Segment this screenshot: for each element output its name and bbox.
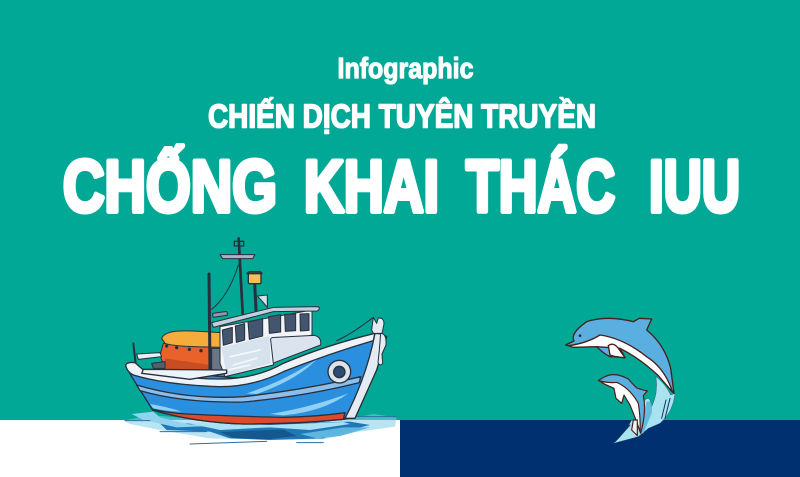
title kicker: Infographic: Infographic [338, 53, 474, 85]
bow rope [337, 317, 373, 341]
illustration: two jumping dolphins [566, 318, 675, 443]
main title: CHỐNG [63, 146, 277, 228]
illustration: fishing boat [123, 238, 397, 444]
mast with crossbar [212, 238, 255, 313]
water splash under boat [123, 412, 397, 444]
heading: campaign line: CHIẾN DỊCH TUYÊN TRUYỀN [208, 98, 596, 136]
water spray [613, 377, 675, 443]
main title: KHAI [304, 146, 439, 228]
main title: THÁC [466, 146, 615, 228]
stern rail [133, 343, 165, 368]
main title: IUU [649, 146, 740, 228]
orange cargo [160, 331, 223, 370]
small dolphin [598, 375, 647, 436]
rear mast [209, 274, 210, 370]
panel: navy bottom right band [400, 420, 800, 477]
panel: white bottom left band [0, 420, 400, 477]
large dolphin [566, 318, 674, 393]
main title [63, 146, 740, 228]
hull [126, 333, 387, 424]
cabin [212, 307, 321, 377]
bow bollard and fender [372, 317, 386, 365]
lamp [247, 272, 267, 310]
